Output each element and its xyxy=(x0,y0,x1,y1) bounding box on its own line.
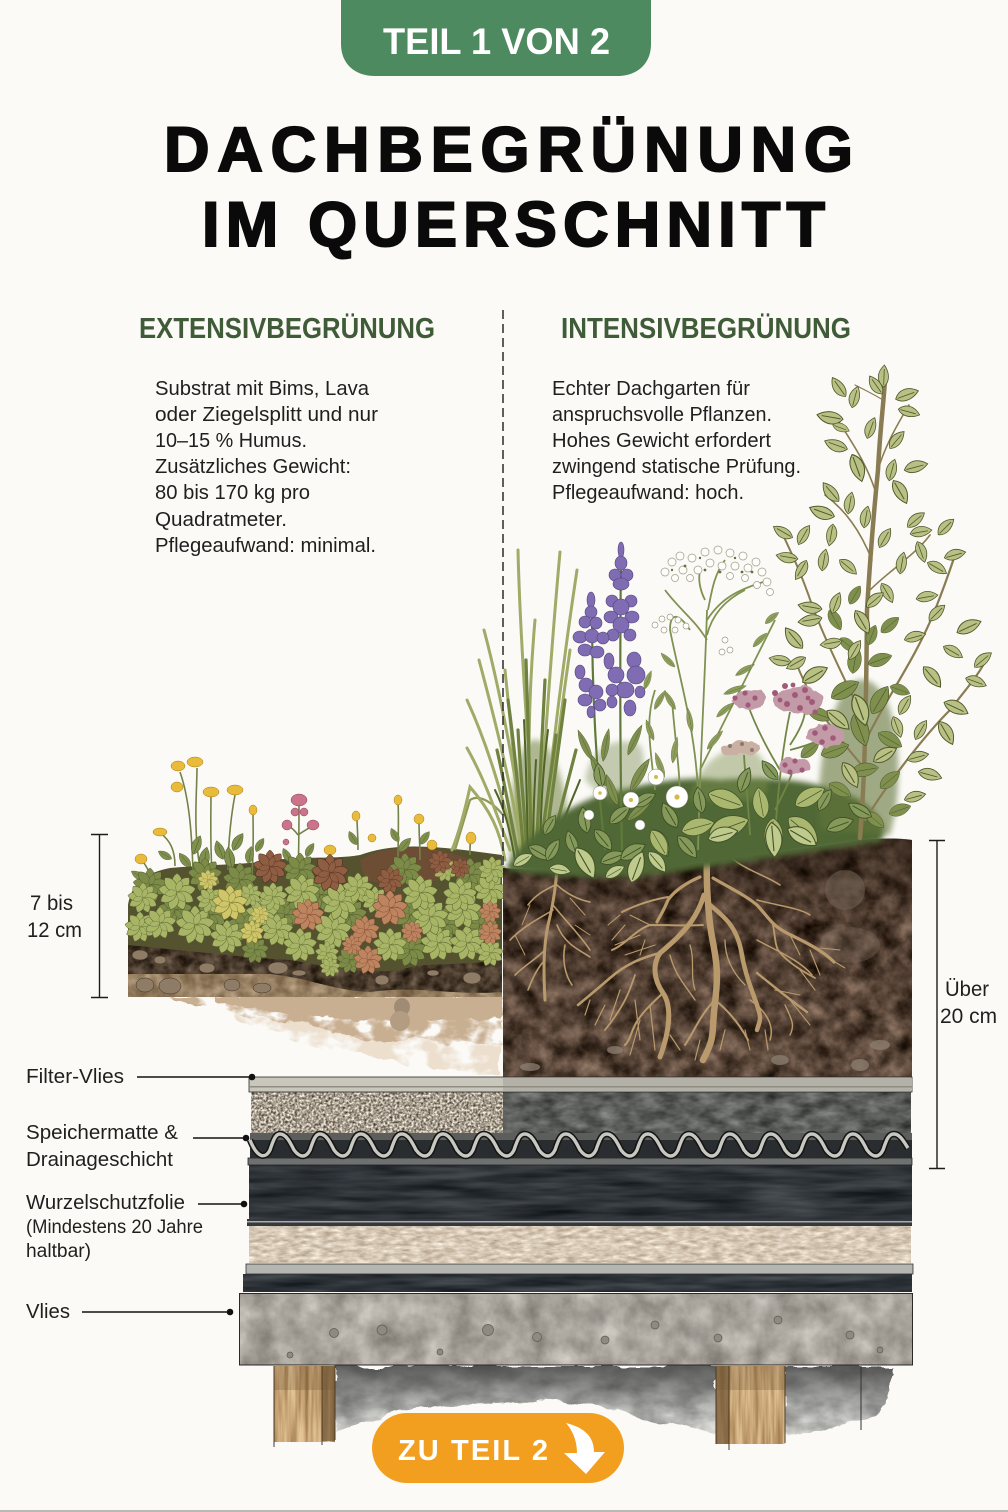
text block: intensive description: Pflegeaufwand: hoch. xyxy=(552,481,744,504)
text block: extensive description: oder Ziegelsplitt und nur xyxy=(155,403,378,426)
callout: Filter-Vlies xyxy=(26,1065,255,1088)
text block: extensive description: Substrat mit Bims, Lava xyxy=(155,377,370,400)
text block: extensive description: Quadratmeter. xyxy=(155,508,287,531)
text block: extensive description: 80 bis 170 kg pro xyxy=(155,481,310,504)
illustration: shrub xyxy=(768,365,994,838)
dense lower foliage xyxy=(797,583,913,832)
text block: extensive description xyxy=(155,377,378,557)
illustration: watercolour wash below extensive substrate xyxy=(165,996,502,1075)
callout: Vlies xyxy=(26,1300,233,1323)
callout: Wurzelschutzfolie xyxy=(26,1191,247,1262)
dimension bracket: über 20 cm xyxy=(929,840,997,1168)
heading: Intensivbegrünung: INTENSIVBEGRÜNUNG xyxy=(561,312,851,345)
header badge: Teil 1 von 2 xyxy=(341,0,651,76)
illustration: green base mass behind perennials xyxy=(505,741,884,877)
title: IM QUERSCHNITT xyxy=(202,190,825,260)
dark red rosettes xyxy=(252,850,471,894)
layer: root protection foil xyxy=(249,1165,912,1219)
callout: Wurzelschutzfolie: haltbar) xyxy=(26,1241,91,1262)
layer: corrugated drainage sheet xyxy=(250,1133,912,1158)
illustration: intensive soil block xyxy=(503,838,912,1077)
header badge: Teil 1 von 2: TEIL 1 VON 2 xyxy=(383,21,610,62)
small root system xyxy=(510,868,590,1000)
callout: Vlies: Vlies xyxy=(26,1300,70,1323)
layer: beige insulation xyxy=(249,1226,911,1263)
daisies xyxy=(584,769,688,830)
layer: dark sealing strip xyxy=(243,1274,912,1292)
illustration: pink valerian xyxy=(724,683,843,835)
large root system xyxy=(578,845,845,1060)
button: zu Teil 2: ZU TEIL 2 xyxy=(398,1435,548,1467)
illustration: lavender xyxy=(573,542,655,850)
text block: intensive description: Hohes Gewicht erfordert xyxy=(552,429,771,452)
illustration: plant roots xyxy=(510,845,845,1060)
illustration: ornamental grass xyxy=(452,550,580,860)
pink blooms xyxy=(282,794,319,845)
stem leaves xyxy=(129,827,432,882)
dimension bracket: über 20 cm: 20 cm xyxy=(940,1005,997,1028)
text block: intensive description xyxy=(552,377,801,504)
green rosettes xyxy=(124,856,507,978)
callout: Speichermatte und Drainageschicht: Speichermatte & xyxy=(26,1121,178,1144)
yellow blooms xyxy=(135,757,476,864)
title: DACHBEGRÜNUNG xyxy=(164,115,853,185)
callout: Wurzelschutzfolie: Wurzelschutzfolie xyxy=(26,1191,185,1214)
layer: thin separator xyxy=(247,1219,912,1226)
dimension bracket: 7 bis 12 cm: 7 bis xyxy=(30,892,73,915)
dimension bracket: 7 bis 12 cm: 12 cm xyxy=(27,919,82,942)
title xyxy=(164,115,853,260)
illustration: extensive substrate layers xyxy=(128,940,502,997)
dimension bracket: 7 bis 12 cm xyxy=(27,834,108,998)
layer: storage mat right side xyxy=(503,1092,911,1138)
yellow-green rosettes xyxy=(197,870,270,944)
layer: concrete slab (Vlies) xyxy=(239,1293,913,1365)
illustration: white yarrow and stems xyxy=(642,546,780,850)
text block: extensive description: Pflegeaufwand: minimal. xyxy=(155,534,376,557)
text block: intensive description: zwingend statische Prüfung. xyxy=(552,455,801,478)
red rosettes xyxy=(291,890,502,975)
icon: curved arrow xyxy=(564,1423,605,1474)
light leaves xyxy=(768,365,994,804)
heading: Extensivbegrünung: EXTENSIVBEGRÜNUNG xyxy=(139,312,435,345)
flower stems xyxy=(142,768,503,880)
callout: Wurzelschutzfolie: (Mindestens 20 Jahre xyxy=(26,1217,203,1238)
layer: wood posts and shadow under slab xyxy=(274,1366,893,1450)
dark green rosette underlayer xyxy=(132,853,498,974)
layer: thin strip above foil xyxy=(248,1158,912,1165)
illustration: broad base leaves and low foliage xyxy=(511,758,874,885)
text block: extensive description: Zusätzliches Gewicht: xyxy=(155,455,351,478)
bottom edge line xyxy=(0,1510,1008,1512)
divider line xyxy=(502,310,504,866)
callout: Speichermatte und Drainageschicht xyxy=(26,1121,249,1171)
text block: intensive description: anspruchsvolle Pflanzen. xyxy=(552,403,772,426)
callout: Filter-Vlies: Filter-Vlies xyxy=(26,1065,124,1088)
text block: extensive description: 10–15 % Humus. xyxy=(155,429,307,452)
button: zu Teil 2 xyxy=(372,1413,624,1483)
layer: storage mat left side xyxy=(251,1092,503,1136)
illustration: sedum ground cover xyxy=(124,757,507,978)
dimension bracket: über 20 cm: Über xyxy=(945,978,989,1001)
layer: filter fleece xyxy=(249,1077,912,1092)
callout: Speichermatte und Drainageschicht: Drainageschicht xyxy=(26,1148,173,1171)
layer: metal strip xyxy=(246,1264,913,1274)
text block: intensive description: Echter Dachgarten für xyxy=(552,377,750,400)
